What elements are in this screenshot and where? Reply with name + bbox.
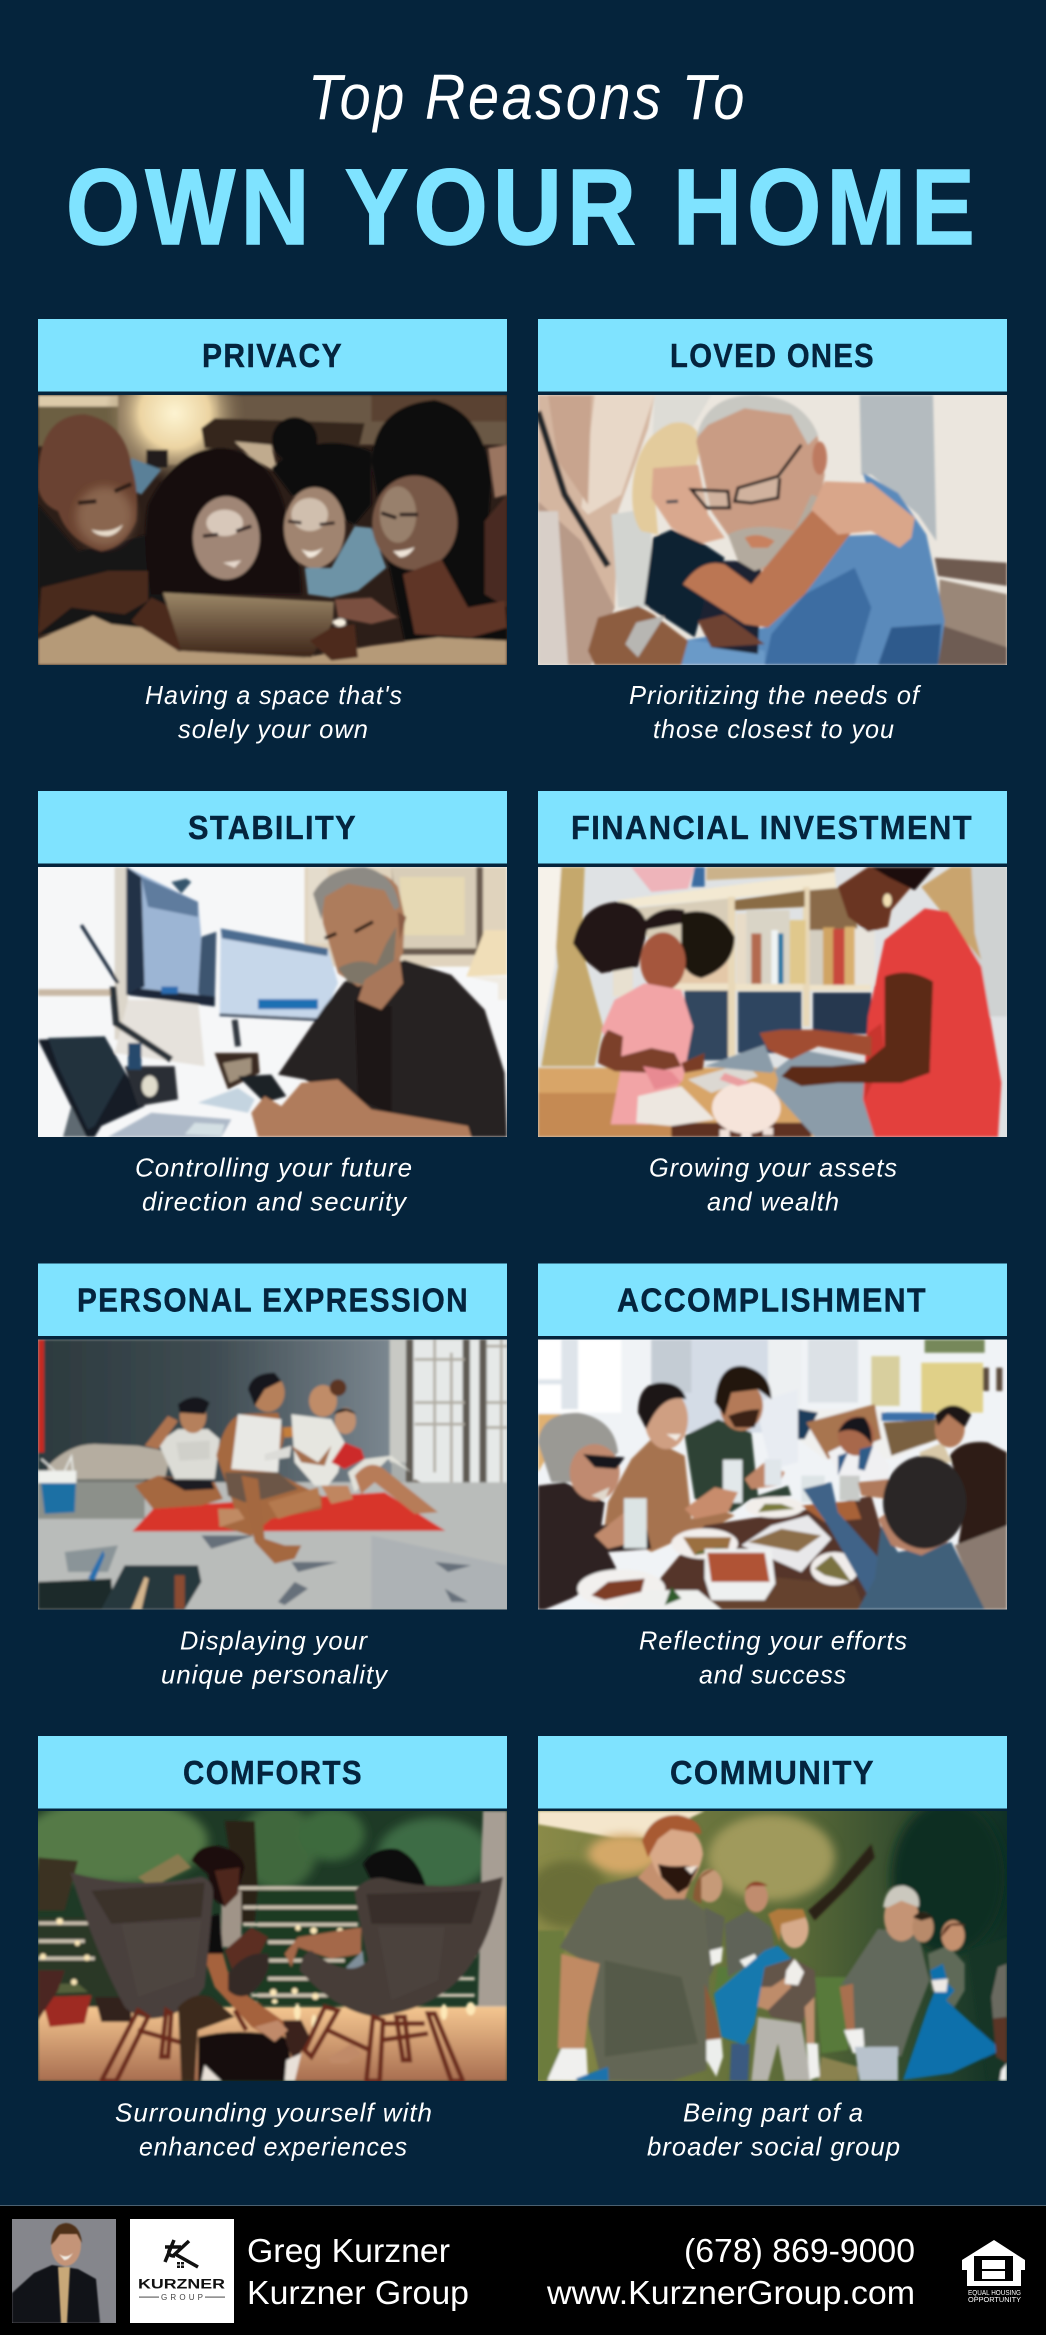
icon: equal housing opportunity: EQUAL HOUSING — [968, 2290, 1021, 2297]
caption: loved ones: Prioritizing the needs of — [629, 680, 922, 710]
caption: privacy — [145, 680, 403, 744]
heading: comforts: COMFORTS — [183, 1754, 363, 1791]
contact details — [546, 2233, 915, 2312]
agent name: Kurzner Group — [247, 2275, 469, 2312]
caption: accomplishment — [639, 1626, 908, 1690]
title — [66, 61, 980, 267]
photo: family eating on the floor of an unfinished room — [38, 1340, 507, 1610]
Kurzner Group logo — [130, 2219, 234, 2323]
icon: equal housing opportunity: OPPORTUNITY — [968, 2297, 1021, 2304]
heading: comforts — [38, 1736, 507, 1808]
heading: stability: STABILITY — [188, 809, 357, 846]
contact details: (678) 869-9000 — [684, 2233, 915, 2270]
panel: comforts — [21, 1736, 507, 2162]
panel: financial investment — [538, 791, 1007, 1216]
heading: financial investment — [538, 791, 1007, 864]
caption: financial investment: and wealth — [707, 1186, 840, 1216]
caption: stability — [135, 1152, 413, 1216]
panel: personal expression — [38, 1264, 507, 1690]
caption: loved ones — [629, 680, 922, 744]
photo: couple on porch chairs with string lights — [38, 1811, 507, 2081]
caption: personal expression — [161, 1626, 389, 1690]
Kurzner Group logo: GROUP — [161, 2293, 203, 2302]
logo icon — [165, 2240, 198, 2267]
caption: comforts: Surrounding yourself with — [115, 2098, 433, 2128]
heading: loved ones: LOVED ONES — [670, 337, 875, 374]
heading: loved ones — [538, 319, 1007, 392]
Kurzner Group logo: KURZNER — [138, 2276, 225, 2292]
caption: community: broader social group — [647, 2132, 901, 2162]
caption: community: Being part of a — [683, 2098, 864, 2128]
caption: stability: Controlling your future — [135, 1152, 413, 1182]
heading: privacy: PRIVACY — [202, 337, 343, 374]
photo: volunteers collecting litter in a park — [538, 1811, 1007, 2081]
caption: privacy: Having a space that's — [145, 680, 403, 710]
heading: financial investment: FINANCIAL INVESTMENT — [571, 809, 973, 846]
heading: personal expression — [38, 1264, 507, 1336]
caption: personal expression: unique personality — [161, 1660, 389, 1690]
heading: personal expression: PERSONAL EXPRESSION — [77, 1282, 469, 1318]
caption: comforts: enhanced experiences — [139, 2132, 408, 2162]
photo: man at desk with monitors and phone — [38, 867, 507, 1137]
agent name: Greg Kurzner — [247, 2233, 450, 2270]
caption: loved ones: those closest to you — [653, 714, 895, 744]
heading: community: COMMUNITY — [670, 1754, 875, 1791]
agent headshot — [12, 2219, 116, 2323]
caption: financial investment: Growing your assets — [649, 1152, 898, 1182]
caption: accomplishment: Reflecting your efforts — [639, 1626, 908, 1656]
heading: accomplishment — [538, 1264, 1007, 1336]
caption: comforts — [115, 2098, 433, 2162]
caption: personal expression: Displaying your — [180, 1626, 368, 1656]
heading: privacy — [38, 319, 507, 392]
panel: accomplishment — [538, 1264, 1007, 1690]
panel: loved ones — [538, 319, 1007, 744]
photo: grandfather hugging child — [538, 395, 1007, 665]
agent name — [247, 2233, 469, 2312]
panel: privacy — [38, 319, 507, 744]
caption: financial investment — [649, 1152, 898, 1216]
heading: accomplishment: ACCOMPLISHMENT — [617, 1282, 927, 1318]
caption: privacy: solely your own — [178, 714, 369, 744]
caption: community — [647, 2098, 901, 2162]
panel: community — [528, 1736, 1007, 2162]
photo: mother and daughter with piggy bank — [538, 867, 1007, 1137]
heading: community — [538, 1736, 1007, 1808]
panel: stability — [38, 791, 507, 1216]
caption: stability: direction and security — [142, 1186, 408, 1216]
icon: equal housing opportunity — [962, 2240, 1025, 2304]
photo: family with tablet in bed — [38, 395, 507, 665]
heading: stability — [38, 791, 507, 864]
photo: family dinner table — [538, 1340, 1007, 1610]
footer bar — [0, 2205, 1046, 2335]
title: Top Reasons To — [308, 61, 747, 133]
caption: accomplishment: and success — [699, 1660, 847, 1690]
contact details: www.KurznerGroup.com — [546, 2275, 915, 2312]
